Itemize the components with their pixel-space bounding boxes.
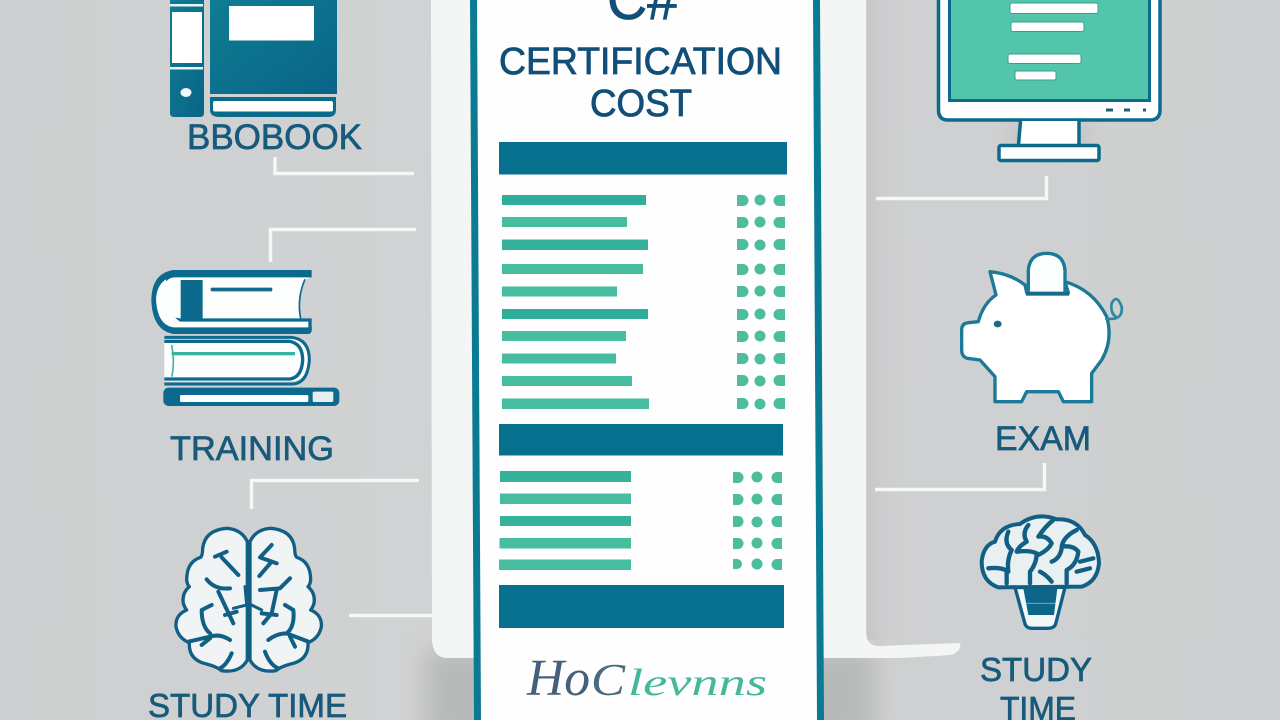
- table header bar 2: [499, 424, 783, 456]
- label: book: BBOBOOK: [187, 118, 362, 157]
- label: study time right: [980, 651, 1092, 720]
- connector: training: [270, 230, 416, 262]
- icon: monitor: [937, 0, 1161, 167]
- cost rows group 2: [499, 471, 782, 570]
- icon: binder and book: [170, 0, 337, 117]
- icon: piggy bank: [962, 253, 1122, 402]
- label: exam: EXAM: [995, 420, 1091, 458]
- signature: Ho: [526, 650, 590, 707]
- connector: book: [275, 157, 414, 174]
- title: [499, 0, 782, 125]
- icon: brain: [176, 528, 321, 671]
- connector: study time left: [252, 480, 419, 509]
- title: COST: [590, 83, 692, 125]
- title: CERTIFICATION: [499, 41, 782, 83]
- table header bar 3: [499, 585, 784, 628]
- cost rows group 1: [502, 194, 785, 410]
- signature: [526, 650, 767, 707]
- connector: computer: [876, 176, 1046, 198]
- icon: stacked books: [151, 270, 339, 406]
- icon: brain in pot: [982, 516, 1099, 628]
- panel: certification cost sheet: [470, 0, 824, 720]
- connector: brain to panel: [349, 614, 433, 617]
- table header bar 1: [499, 142, 787, 174]
- signature: levnns: [628, 662, 767, 704]
- connector: exam: [875, 463, 1044, 490]
- panel: backing card: [431, 0, 960, 658]
- label: study time right: STUDY: [980, 651, 1092, 688]
- signature: C: [591, 654, 626, 705]
- label: training: TRAINING: [170, 430, 334, 468]
